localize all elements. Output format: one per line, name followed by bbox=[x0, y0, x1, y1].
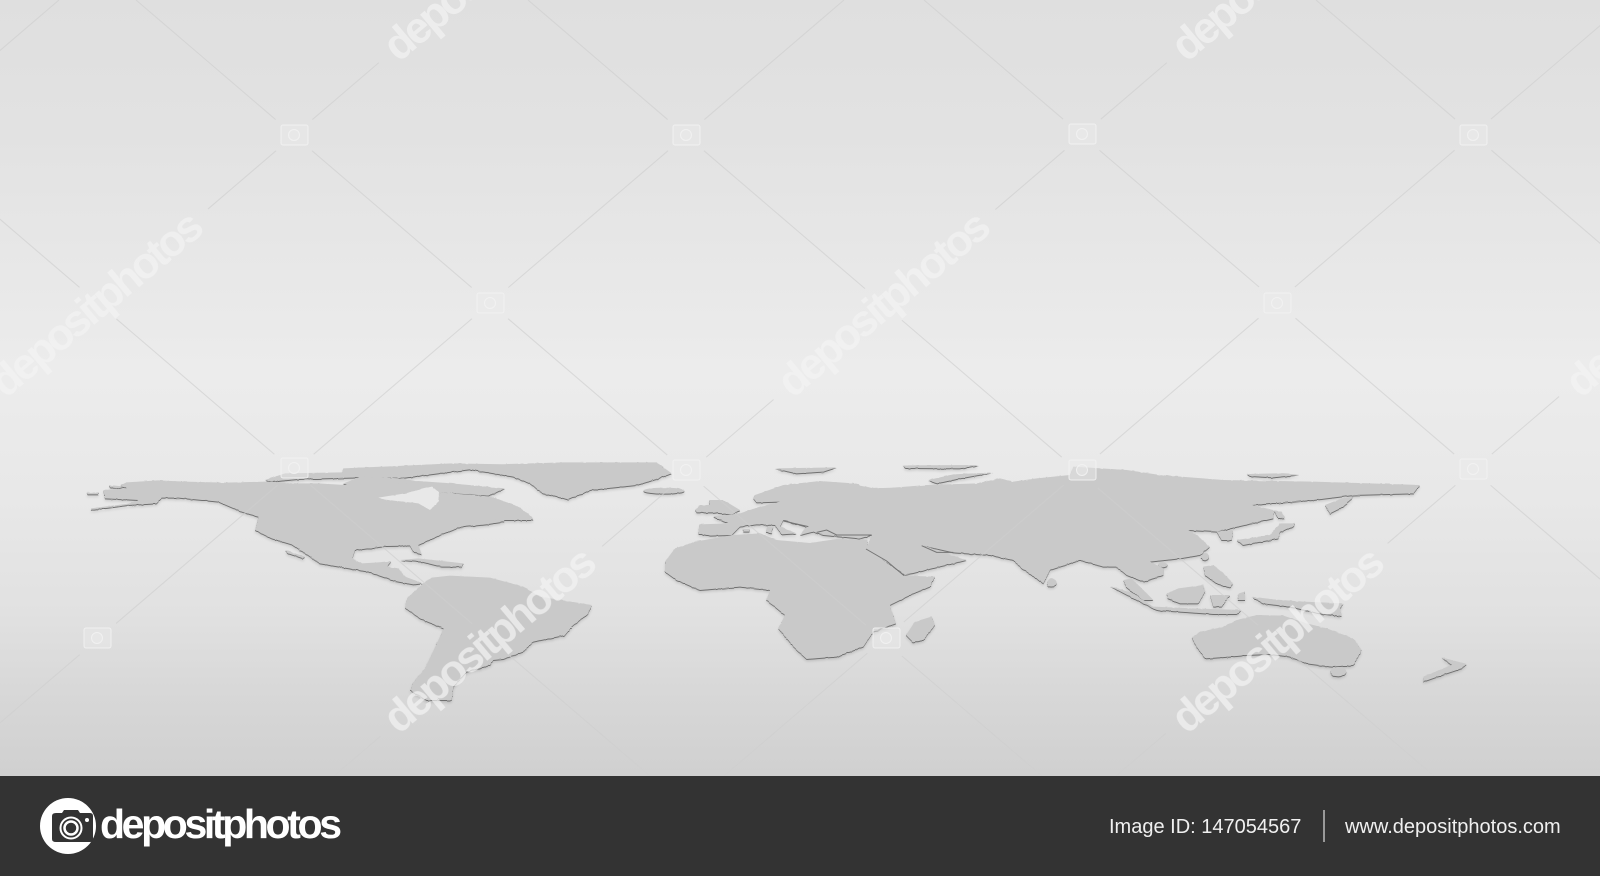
aleutian islands bbox=[87, 485, 125, 494]
hudson bay bbox=[378, 487, 439, 510]
newfoundland bbox=[480, 518, 504, 525]
world map bbox=[87, 462, 1467, 700]
inner coast shadow lines bbox=[783, 521, 953, 576]
greenland bbox=[465, 462, 672, 499]
watermark: depositphotos bbox=[768, 201, 1000, 407]
africa bbox=[665, 533, 935, 659]
kamchatka region bbox=[1325, 497, 1353, 513]
philippines bbox=[1203, 565, 1233, 587]
watermark: depositphotos bbox=[374, 537, 606, 743]
old world group bbox=[665, 465, 1420, 659]
severnaya islands bbox=[1247, 473, 1299, 477]
taiwan bbox=[1201, 553, 1209, 560]
malay peninsula bbox=[1123, 578, 1153, 600]
baffin strip bbox=[343, 477, 418, 486]
mediterranean islands bbox=[743, 527, 773, 533]
sumatra and java bbox=[1110, 586, 1242, 614]
eurasia bbox=[698, 467, 1420, 583]
australia bbox=[1192, 615, 1362, 667]
baja california bbox=[285, 550, 305, 558]
tasmania bbox=[1330, 667, 1346, 676]
iceland bbox=[643, 488, 685, 494]
franz josef land bbox=[903, 465, 979, 468]
korea bbox=[1217, 530, 1233, 540]
south america bbox=[405, 576, 592, 700]
new zealand bbox=[1423, 657, 1467, 682]
sulawesi bbox=[1210, 592, 1245, 607]
website url: www.depositphotos.com bbox=[1344, 816, 1561, 838]
novaya zemlya bbox=[928, 472, 993, 483]
faint diagonal watermark lines bbox=[0, 0, 1600, 670]
east asia group bbox=[1047, 473, 1353, 587]
hainan bbox=[1158, 562, 1168, 567]
japan bbox=[1237, 523, 1295, 545]
image id: Image ID: 147054567 bbox=[1109, 816, 1301, 838]
borneo bbox=[1167, 585, 1205, 603]
logo wordmark: depositphotos bbox=[100, 801, 342, 847]
logo icon: camera in circle bbox=[40, 798, 96, 854]
seram and new guinea bbox=[1252, 597, 1343, 616]
madagascar bbox=[906, 617, 935, 642]
indonesia and oceania group bbox=[1110, 565, 1467, 682]
footer bar bbox=[0, 776, 1600, 876]
north america bbox=[91, 480, 533, 584]
sakhalin bbox=[1273, 510, 1285, 518]
sri lanka bbox=[1047, 579, 1057, 587]
greenland and south america group bbox=[405, 462, 685, 700]
svalbard bbox=[775, 467, 837, 473]
small camera watermark icons bbox=[84, 124, 1487, 648]
cuba bbox=[400, 558, 463, 567]
north america group bbox=[87, 463, 533, 584]
canadian arctic islands bbox=[265, 463, 509, 482]
uk and ireland bbox=[695, 500, 740, 514]
watermark: depositphotos bbox=[1162, 537, 1394, 743]
